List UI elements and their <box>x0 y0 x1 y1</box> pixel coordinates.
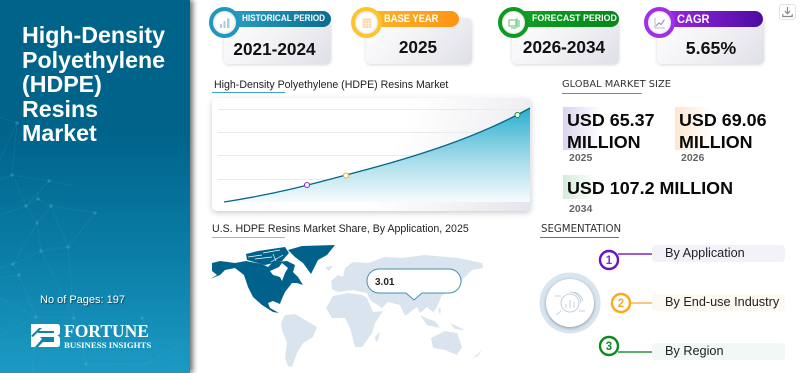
logo: Fortune Business Insights <box>31 321 151 350</box>
panel: area chart <box>212 98 531 211</box>
stat: 2025: MILLION <box>567 132 641 152</box>
stat: 2026: MILLION <box>679 132 753 152</box>
connector <box>618 253 652 254</box>
light: Eurasia <box>331 255 483 316</box>
marker: 2025 <box>304 182 310 188</box>
icon ring <box>351 7 382 38</box>
light: Madagascar <box>375 332 380 342</box>
icon: bars <box>220 18 230 28</box>
segment: by region <box>598 336 785 360</box>
stat: 2026: 2026 <box>681 152 704 164</box>
label pill: BASE YEAR <box>384 13 438 25</box>
card <box>366 18 472 64</box>
number badge <box>598 250 620 270</box>
panel: sidebar <box>0 0 190 373</box>
number badge: 2 <box>618 298 624 310</box>
title <box>22 22 165 146</box>
light: Australia <box>431 331 462 355</box>
connector <box>631 302 652 304</box>
label pill: FORECAST PERIOD <box>532 13 617 24</box>
stat: base year <box>351 7 474 66</box>
label pill <box>513 11 619 27</box>
world map <box>210 245 483 367</box>
icon: segmentation hub <box>540 272 600 334</box>
label pill: CAGR <box>677 12 710 26</box>
heading: segmentation: SEGMENTATION <box>541 224 621 235</box>
icon ring <box>209 7 240 38</box>
heading: map: U.S. HDPE Resins Market Share, By Application, 2025 <box>212 223 469 235</box>
number badge: 1 <box>606 255 613 267</box>
light: New Zealand <box>473 350 482 358</box>
page count: No of Pages: 197 <box>40 294 125 306</box>
label pill: HISTORICAL PERIOD <box>242 13 325 24</box>
marker: 2034 <box>515 112 520 118</box>
label: By End-use Industry <box>665 295 779 309</box>
logo mark <box>31 324 60 347</box>
title: Polyethylene <box>22 46 165 72</box>
logo tagline: BUSINESS INSIGHTS <box>64 340 151 350</box>
stat: 2026 <box>675 107 767 164</box>
title: Market <box>22 120 97 146</box>
icon: calendar <box>362 18 372 28</box>
marker: 2026 <box>344 173 348 178</box>
chart <box>218 107 530 203</box>
number badge: 3 <box>606 341 612 353</box>
light: Indonesia <box>420 315 440 328</box>
icon ring <box>498 7 529 38</box>
light: New Guinea <box>450 323 465 330</box>
title: High-Density <box>22 22 165 48</box>
label: By Application <box>665 246 745 260</box>
area fill <box>224 108 530 202</box>
icon: forecast chart <box>508 18 520 29</box>
value: 2021-2024 <box>233 39 316 59</box>
stat: historical period <box>209 7 332 66</box>
segment: by application <box>598 245 785 270</box>
icon: growth chart <box>654 18 665 28</box>
callout: 3.01: 3.01 <box>375 277 395 288</box>
label <box>652 245 785 262</box>
callout: 3.01 <box>367 269 461 300</box>
growth line <box>224 108 530 202</box>
stat: forecast period <box>498 7 620 66</box>
network pattern <box>0 117 190 372</box>
number badge <box>598 336 620 356</box>
light: Philippines <box>438 308 441 315</box>
card <box>224 18 331 64</box>
card <box>657 18 764 64</box>
label pill <box>659 11 763 27</box>
heading: chart: High-Density Polyethylene (HDPE) Resins Market <box>214 79 448 91</box>
label: By Region <box>665 344 724 358</box>
light: Iceland <box>325 266 333 271</box>
stat: 2025: 2025 <box>569 152 592 164</box>
title: (HDPE) <box>22 71 102 97</box>
label pill <box>366 11 459 27</box>
stat: 2025 <box>563 107 655 164</box>
icon: download button <box>779 4 796 20</box>
panel: market size values <box>563 107 767 215</box>
stat: 2034: USD 107.2 MILLION <box>567 178 733 198</box>
stat: 2026: USD 69.06 <box>679 110 767 130</box>
highlighted: North America <box>210 245 335 313</box>
title: Resins <box>22 96 98 122</box>
value: 2025 <box>399 37 437 57</box>
label pill <box>225 11 331 27</box>
stat: 2034 <box>563 175 733 215</box>
light: South America <box>281 314 317 367</box>
stat: 2025: USD 65.37 <box>567 110 655 130</box>
light: Africa <box>326 293 383 347</box>
number badge <box>610 292 632 314</box>
light: Japan <box>457 278 462 287</box>
heading: global market size: GLOBAL MARKET SIZE <box>562 79 671 90</box>
value: 5.65% <box>686 38 736 58</box>
stat: CAGR <box>644 7 766 66</box>
connector <box>618 351 652 352</box>
value: 2026-2034 <box>523 37 605 57</box>
logo wordmark: FORTUNE <box>64 321 149 341</box>
icon ring <box>644 7 675 38</box>
card <box>512 18 619 64</box>
label <box>652 343 785 360</box>
stat: 2034: 2034 <box>569 203 592 215</box>
segment: by end-use industry <box>610 292 785 314</box>
